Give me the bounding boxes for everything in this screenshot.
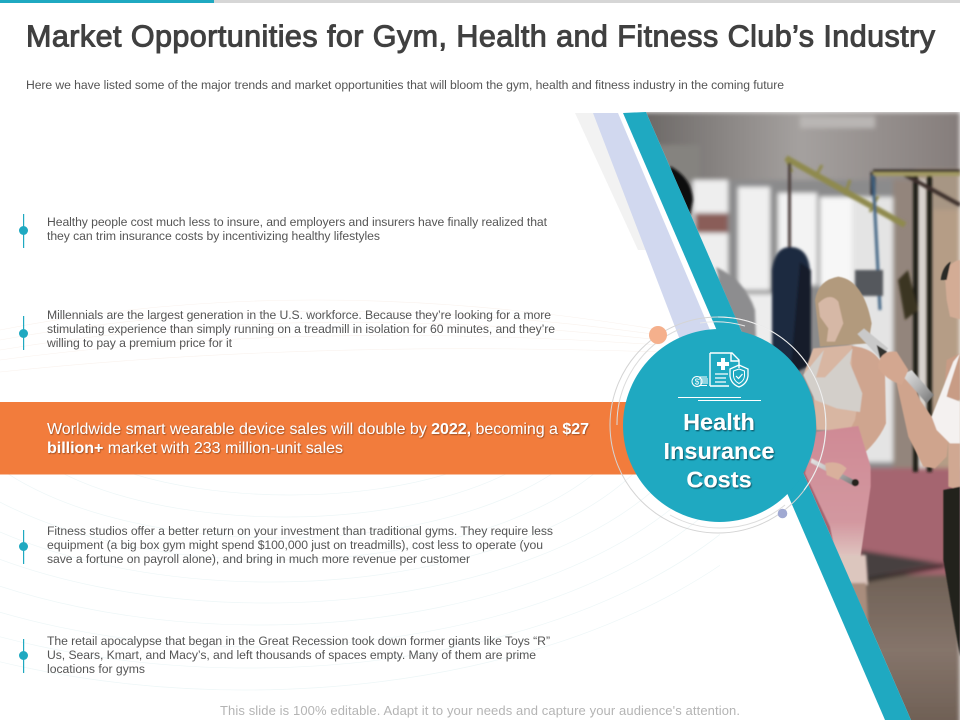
- lower leg of woman left: [841, 553, 870, 622]
- orange highlight band: [0, 402, 650, 474]
- item 4: retail apocalypse: [19, 634, 550, 676]
- diagonal lavender stripe: [593, 113, 710, 340]
- highlight text: [47, 421, 589, 457]
- circle label: Insurance: [663, 438, 775, 464]
- text 4: Us, Sears, Kmart, and Macy’s, and left thousands of spaces empty. Many of them are prime: [47, 648, 536, 662]
- diagonal teal stripe: [623, 112, 911, 720]
- rope and punching bag: [788, 163, 791, 248]
- highlight text: billion+ market with 233 million-unit sales: [47, 440, 343, 457]
- footer note: This slide is 100% editable. Adapt it to your needs and capture your audience's attention.: [220, 703, 740, 718]
- circle label: Health: [683, 409, 755, 435]
- icon: insurance document with shield and coins: [692, 353, 748, 387]
- man head and shoulder: [670, 166, 693, 216]
- diagonal light gray stripe: [575, 113, 653, 250]
- highlight text: Worldwide smart wearable device sales will double by 2022, becoming a $27: [47, 421, 589, 438]
- text 4: [47, 634, 550, 676]
- title: Market Opportunities for Gym, Health and Fitness Club’s Industry: [26, 20, 936, 54]
- text 2: Millennials are the largest generation in the U.S. workforce. Because they’re looking for a more: [47, 308, 551, 322]
- text 2: stimulating experience than simply running on a treadmill in isolation for 60 minutes, and they’re: [47, 322, 555, 336]
- circle label: [663, 409, 775, 492]
- icon: insurance document with shield and coins: $: [695, 378, 700, 386]
- divider lines: [678, 398, 761, 400]
- back wall and windows: [690, 180, 895, 480]
- peach dot: [649, 326, 667, 344]
- black rack: [873, 172, 960, 195]
- text 1: they can trim insurance costs by incentivizing healthy lifestyles: [47, 229, 380, 243]
- marker 3: [19, 530, 28, 564]
- marker 1: [19, 214, 28, 248]
- lavender dot: [778, 509, 787, 518]
- text 4: locations for gyms: [47, 662, 145, 676]
- text 3: save a fortune on payroll alone), and bring in much more revenue per customer: [47, 552, 470, 566]
- top progress bar: [0, 0, 960, 3]
- woman right: [857, 260, 960, 657]
- marker 4: [19, 639, 28, 673]
- decorative rings around circle: [610, 317, 826, 533]
- woman left: [803, 277, 886, 560]
- teal circle: Health Insurance Costs: [623, 329, 816, 522]
- item 3: fitness studios: [19, 524, 553, 566]
- subtitle: Here we have listed some of the major trends and market opportunities that will bloom the gym, health and fitness industry in the coming future: [26, 78, 784, 92]
- text 1: [47, 215, 548, 243]
- circle label: Costs: [686, 466, 752, 492]
- gym photo: [640, 112, 960, 720]
- text 3: Fitness studios offer a better return on your investment than traditional gyms. They require less: [47, 524, 553, 538]
- yellow truss: [786, 158, 905, 225]
- text 1: Healthy people cost much less to insure, and employers and insurers have finally realized that: [47, 215, 548, 229]
- item 2: millennials: [19, 308, 555, 350]
- background wave lines: [0, 136, 880, 706]
- item 1: insurance: [19, 214, 548, 248]
- text 3: [47, 524, 553, 566]
- text 3: equipment (a big box gym might spend $100,000 just on treadmills), cost less to operate (you: [47, 538, 543, 552]
- text 2: willing to pay a premium price for it: [46, 336, 233, 350]
- floor: [804, 466, 960, 579]
- text 2: [46, 308, 555, 350]
- text 4: The retail apocalypse that began in the Great Recession took down former giants like Toys “R”: [47, 634, 550, 648]
- marker 2: [19, 316, 28, 350]
